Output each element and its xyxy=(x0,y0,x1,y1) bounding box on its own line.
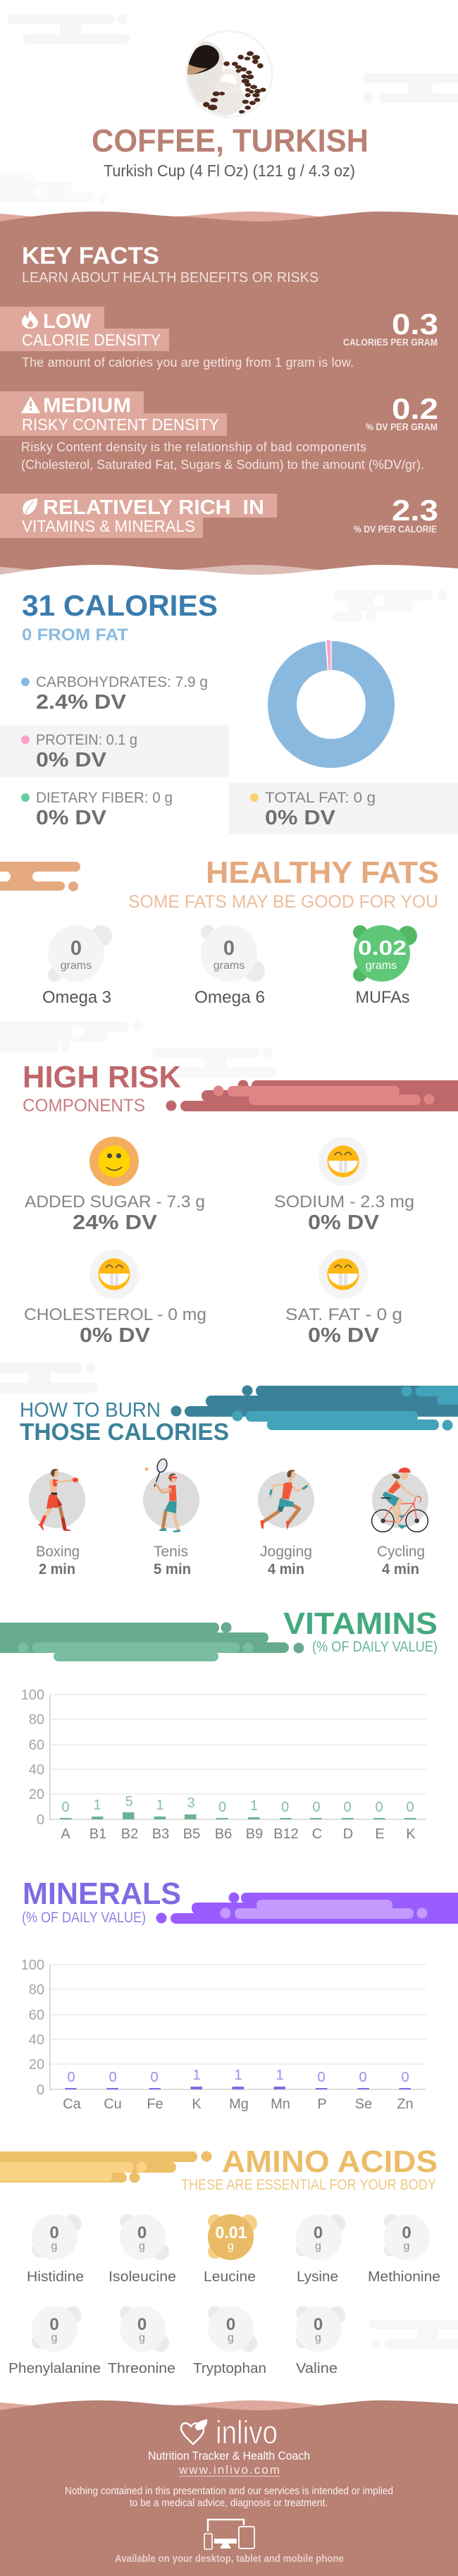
fact: low calorie density: LOW xyxy=(43,310,92,333)
heading: those calories: THOSE CALORIES xyxy=(20,1419,229,1446)
risk item: sodium xyxy=(274,1137,414,1234)
bar chart: minerals: 1 xyxy=(276,2068,284,2083)
amino acid: phenylalanine: g xyxy=(51,2332,57,2344)
icon: devices xyxy=(204,2520,254,2549)
bar chart: vitamins: 0 xyxy=(375,1800,383,1815)
bar chart: minerals: 20 xyxy=(29,2057,44,2073)
stat: omega 3: Omega 3 xyxy=(42,988,111,1007)
bar chart: vitamins: 3 xyxy=(187,1795,195,1811)
subheading: components: COMPONENTS xyxy=(23,1096,145,1116)
bar chart: vitamins: 20 xyxy=(29,1787,44,1802)
risk item: added sugar xyxy=(25,1137,205,1234)
activity: tennis: Tenis xyxy=(154,1544,188,1560)
disclaimer xyxy=(65,2485,393,2509)
legend: total fat: TOTAL FAT: 0 g xyxy=(265,790,376,806)
icon: flame xyxy=(22,310,38,329)
legend: total fat: 0% DV xyxy=(265,807,336,829)
amino acid: isoleucine xyxy=(109,2214,176,2285)
amino acid: threonine xyxy=(108,2306,175,2376)
subheading: minerals: (% OF DAILY VALUE) xyxy=(22,1910,146,1926)
amino acid: methionine: g xyxy=(404,2240,409,2252)
amino acid: lysine: 0 xyxy=(314,2223,323,2242)
fact: relatively rich in vitamins and minerals: % DV PER CALORIE xyxy=(354,524,437,535)
fact: low calorie density: CALORIES PER GRAM xyxy=(343,337,438,348)
legend: carbohydrates xyxy=(21,674,208,714)
donut chart: calorie split xyxy=(268,640,395,768)
amino acid: valine: 0 xyxy=(314,2315,323,2334)
bar chart: vitamins: 80 xyxy=(29,1712,44,1728)
bar chart: vitamins xyxy=(21,1687,426,1842)
bar chart: vitamins: B9 xyxy=(246,1826,263,1842)
amino acid: methionine: 0 xyxy=(402,2223,411,2242)
activity: cycling xyxy=(372,1467,428,1577)
panel: calories xyxy=(0,589,458,834)
stat: mufas: 0.02 xyxy=(358,937,407,960)
decorative cloud: bottom right xyxy=(369,2319,458,2349)
amino acid: leucine: Leucine xyxy=(204,2269,256,2285)
legend: dietary fiber xyxy=(21,790,173,829)
section header graphic: amino acids xyxy=(0,2151,211,2183)
bar chart: vitamins: 0 xyxy=(281,1800,289,1815)
icon: smile xyxy=(89,1137,139,1186)
amino acid: histidine: 0 xyxy=(49,2223,59,2242)
amino acid: methionine: Methionine xyxy=(368,2269,440,2285)
bar chart: vitamins: B1 xyxy=(89,1826,106,1842)
decorative cloud: mid left xyxy=(0,1020,144,1052)
icon: boxer xyxy=(39,1469,78,1531)
amino acid: phenylalanine: Phenylalanine xyxy=(8,2361,101,2376)
bar chart: vitamins: 1 xyxy=(250,1798,258,1814)
website link: www.inlivo.com xyxy=(178,2463,280,2477)
fact: medium risky content density: MEDIUM xyxy=(43,395,131,417)
amino acid: tryptophan: g xyxy=(228,2332,234,2344)
risk item: cholesterol xyxy=(24,1250,206,1347)
amino acid: tryptophan xyxy=(193,2306,266,2376)
bar chart: minerals: P xyxy=(317,2096,327,2112)
risk item: saturated fat xyxy=(285,1250,402,1347)
stat: omega 6: 0 xyxy=(223,937,235,960)
bar chart: minerals: 0 xyxy=(317,2070,326,2085)
bar chart: vitamins: 1 xyxy=(156,1797,164,1813)
icon: cyclist xyxy=(372,1467,428,1532)
subheading: vitamins: (% OF DAILY VALUE) xyxy=(312,1639,438,1655)
amino acid: valine: Valine xyxy=(296,2361,338,2376)
bar chart: vitamins: D xyxy=(343,1826,353,1842)
bar chart: vitamins: 40 xyxy=(29,1762,44,1778)
amino acid: threonine: Threonine xyxy=(108,2361,175,2376)
food photo: coffee cup and beans xyxy=(185,31,272,117)
amino acid: lysine: g xyxy=(315,2240,321,2252)
amino acid: histidine xyxy=(27,2214,84,2285)
section header graphic: minerals xyxy=(156,1893,458,1924)
risk item: added sugar: 24% DV xyxy=(73,1211,158,1234)
bar chart: vitamins: B6 xyxy=(215,1826,232,1842)
fact: relatively rich in vitamins and minerals: 2.3 xyxy=(392,494,438,527)
amino acid: histidine: Histidine xyxy=(27,2269,84,2285)
fact: low calorie density: 0.3 xyxy=(392,307,438,341)
bar chart: minerals: 60 xyxy=(29,2008,44,2023)
fact: relatively rich in vitamins and minerals: VITAMINS & MINERALS xyxy=(22,517,195,535)
legend: protein xyxy=(0,725,229,777)
amino acid: tryptophan: Tryptophan xyxy=(193,2361,266,2376)
bar chart: minerals: 0 xyxy=(67,2070,75,2085)
stat: omega 3: 0 xyxy=(70,937,82,960)
legend: carbohydrates: 2.4% DV xyxy=(36,691,127,714)
activity: cycling: 4 min xyxy=(382,1561,419,1577)
activity: tennis: 5 min xyxy=(154,1561,191,1577)
bar chart: vitamins: B5 xyxy=(183,1826,200,1842)
activity: tennis xyxy=(143,1458,199,1577)
activity: cycling: Cycling xyxy=(377,1544,425,1560)
stat: omega 6: Omega 6 xyxy=(194,988,265,1007)
amino acid: lysine: Lysine xyxy=(297,2269,338,2285)
fact: medium risky content density: (Cholesterol, Saturated Fat, Sugars & Sodium) to the amount (%DV/gr). xyxy=(21,458,424,472)
risk item: added sugar: ADDED SUGAR - 7.3 g xyxy=(25,1192,205,1211)
risk item: cholesterol: CHOLESTEROL - 0 mg xyxy=(24,1305,206,1324)
amino acid: isoleucine: g xyxy=(139,2240,145,2252)
bar chart: minerals: Fe xyxy=(147,2096,163,2112)
legend: dietary fiber: DIETARY FIBER: 0 g xyxy=(36,790,173,806)
amino acid: leucine xyxy=(204,2214,257,2285)
decorative cloud: top right xyxy=(363,73,458,103)
bar chart: minerals: 40 xyxy=(29,2032,44,2048)
bar chart: minerals: 0 xyxy=(37,2082,44,2098)
stat: mufas xyxy=(353,925,417,1007)
bar chart: vitamins: B2 xyxy=(121,1826,138,1842)
fact: low calorie density xyxy=(0,307,438,370)
stat: omega 3 xyxy=(42,925,112,1007)
availability note: Available on your desktop, tablet and mobile phone xyxy=(115,2553,344,2565)
legend: protein: PROTEIN: 0.1 g xyxy=(36,732,137,748)
heading: calories: 31 CALORIES xyxy=(22,589,218,622)
logo wordmark: inlivo xyxy=(216,2414,278,2450)
amino acid: threonine: g xyxy=(139,2332,145,2344)
activity: boxing: 2 min xyxy=(39,1561,75,1577)
amino acid: lysine xyxy=(296,2214,345,2285)
amino acid: leucine: 0.01 xyxy=(216,2223,247,2242)
decorative cloud: mid centre xyxy=(152,1048,275,1078)
tagline: Nutrition Tracker & Health Coach xyxy=(148,2449,310,2462)
bar chart: minerals: 1 xyxy=(192,2068,201,2083)
amino acid: threonine: 0 xyxy=(137,2315,147,2334)
activity: jogging: Jogging xyxy=(260,1544,312,1560)
stat: mufas: grams xyxy=(366,960,397,972)
amino acid: histidine: g xyxy=(51,2240,57,2252)
fact: medium risky content density: RISKY CONTENT DENSITY xyxy=(22,415,219,434)
bar chart: minerals: Se xyxy=(355,2096,372,2112)
stat: mufas: MUFAs xyxy=(355,988,410,1007)
fact: relatively rich in vitamins and minerals: RELATIVELY RICH IN xyxy=(43,496,264,519)
heading: vitamins: VITAMINS xyxy=(283,1606,438,1641)
bar chart: vitamins: B12 xyxy=(273,1826,299,1842)
bar chart: vitamins: 100 xyxy=(21,1687,44,1703)
bar chart: vitamins: 0 xyxy=(343,1800,352,1815)
bar chart: minerals: 0 xyxy=(401,2070,409,2085)
fact: medium risky content density: 0.2 xyxy=(392,392,438,425)
bar chart: vitamins: K xyxy=(406,1826,416,1842)
icon: grin xyxy=(89,1250,139,1299)
bar chart: minerals: Mg xyxy=(229,2096,249,2112)
amino acid: tryptophan: 0 xyxy=(226,2315,235,2334)
bar chart: minerals: Zn xyxy=(397,2096,414,2112)
legend: dietary fiber: 0% DV xyxy=(36,807,107,829)
bar chart: vitamins: 1 xyxy=(93,1797,101,1813)
heading: healthy fats: HEALTHY FATS xyxy=(206,855,439,890)
bar chart: minerals: 1 xyxy=(234,2068,242,2083)
serving size subtitle: Turkish Cup (4 Fl Oz) (121 g / 4.3 oz) xyxy=(104,161,355,180)
icon: grin xyxy=(318,1137,368,1186)
bar chart: vitamins: C xyxy=(312,1826,322,1842)
disclaimer: Nothing contained in this presentation and our services is intended or implied xyxy=(65,2485,393,2497)
legend: carbohydrates: CARBOHYDRATES: 7.9 g xyxy=(36,674,208,690)
section header graphic: high risk xyxy=(166,1080,458,1111)
heading: how to burn: HOW TO BURN xyxy=(20,1399,161,1422)
amino acid: leucine: g xyxy=(228,2240,234,2252)
activity: boxing: Boxing xyxy=(36,1544,80,1560)
bar chart: vitamins: A xyxy=(61,1826,70,1842)
stat: omega 6 xyxy=(194,925,265,1007)
icon: runner xyxy=(260,1470,309,1530)
decorative cloud: left of title xyxy=(0,173,108,203)
amino acid: valine: g xyxy=(315,2332,321,2344)
section header graphic: healthy fats xyxy=(0,862,80,891)
decorative cloud: top left xyxy=(7,14,130,44)
disclaimer: to be a medical advice, diagnosis or treatment. xyxy=(130,2497,328,2509)
fact: relatively rich in vitamins and minerals xyxy=(0,494,438,538)
bar chart: minerals: 0 xyxy=(109,2070,117,2085)
activity: jogging xyxy=(258,1470,314,1577)
subheading: healthy fats: SOME FATS MAY BE GOOD FOR YOU xyxy=(128,892,438,912)
amino acid: valine xyxy=(296,2306,345,2376)
icon: inlivo heart logo xyxy=(181,2420,206,2444)
amino acid: isoleucine: Isoleucine xyxy=(109,2269,176,2285)
bar chart: vitamins: B3 xyxy=(152,1826,169,1842)
fact: low calorie density: CALORIE DENSITY xyxy=(22,331,161,349)
bar chart: minerals: 0 xyxy=(150,2070,159,2085)
icon: warning triangle xyxy=(21,396,40,413)
fact: low calorie density: The amount of calories you are getting from 1 gram is low. xyxy=(22,355,354,370)
stat: omega 3: grams xyxy=(61,960,92,972)
title: COFFEE, TURKISH xyxy=(92,123,369,159)
bar chart: vitamins: 0 xyxy=(312,1800,321,1815)
bar chart: vitamins: 0 xyxy=(218,1800,226,1815)
decorative cloud: calories xyxy=(333,590,447,622)
amino acid: methionine xyxy=(368,2214,440,2285)
panel: key facts xyxy=(0,212,458,585)
fact: medium risky content density: Risky Content density is the relationship of bad components xyxy=(21,440,366,454)
heading: high risk: HIGH RISK xyxy=(23,1060,181,1094)
icon: leaf xyxy=(23,498,37,515)
activity: boxing xyxy=(29,1469,85,1577)
bar chart: vitamins: E xyxy=(375,1826,385,1842)
risk item: saturated fat: SAT. FAT - 0 g xyxy=(285,1305,402,1324)
decorative cloud: lower left xyxy=(0,1363,98,1393)
bar chart: minerals: 80 xyxy=(29,1982,44,1998)
activity: jogging: 4 min xyxy=(268,1561,304,1577)
fact: medium risky content density: % DV PER GRAM xyxy=(366,422,438,432)
bar chart: minerals: Mn xyxy=(271,2096,290,2112)
bar chart: vitamins: 0 xyxy=(37,1812,44,1828)
amino acid: phenylalanine xyxy=(8,2306,101,2376)
icon: tennis player xyxy=(145,1458,180,1532)
risk item: sodium: 0% DV xyxy=(308,1211,380,1234)
bar chart: minerals: 100 xyxy=(21,1958,44,1973)
subheading: key facts: LEARN ABOUT HEALTH BENEFITS OR RISKS xyxy=(22,270,318,286)
legend: total fat xyxy=(229,783,458,834)
heading: minerals: MINERALS xyxy=(23,1876,181,1911)
icon: grin xyxy=(318,1250,368,1299)
stat: omega 6: grams xyxy=(213,960,245,972)
heading: key facts: KEY FACTS xyxy=(22,243,159,269)
amino acid: isoleucine: 0 xyxy=(137,2223,147,2242)
section header graphic: vitamins xyxy=(0,1622,304,1661)
bar chart: vitamins: 5 xyxy=(125,1794,133,1809)
fact: medium risky content density xyxy=(0,391,438,472)
risk item: saturated fat: 0% DV xyxy=(308,1324,380,1347)
subheading: from fat: 0 FROM FAT xyxy=(22,625,128,645)
legend: protein: 0% DV xyxy=(36,749,107,771)
bar chart: vitamins: 0 xyxy=(61,1800,70,1815)
heading: amino acids: AMINO ACIDS xyxy=(222,2144,438,2179)
bar chart: vitamins: 0 xyxy=(406,1800,414,1815)
bar chart: minerals: Ca xyxy=(63,2096,82,2112)
risk item: cholesterol: 0% DV xyxy=(80,1324,151,1347)
risk item: sodium: SODIUM - 2.3 mg xyxy=(274,1192,414,1211)
bar chart: minerals xyxy=(21,1958,426,2112)
section header graphic: burn calories xyxy=(171,1385,458,1430)
panel: footer xyxy=(0,2400,458,2576)
amino acid: phenylalanine: 0 xyxy=(49,2315,59,2334)
bar chart: vitamins: 60 xyxy=(29,1738,44,1753)
bar chart: minerals: 0 xyxy=(359,2070,367,2085)
bar chart: minerals: K xyxy=(192,2096,202,2112)
bar chart: minerals: Cu xyxy=(104,2096,122,2112)
